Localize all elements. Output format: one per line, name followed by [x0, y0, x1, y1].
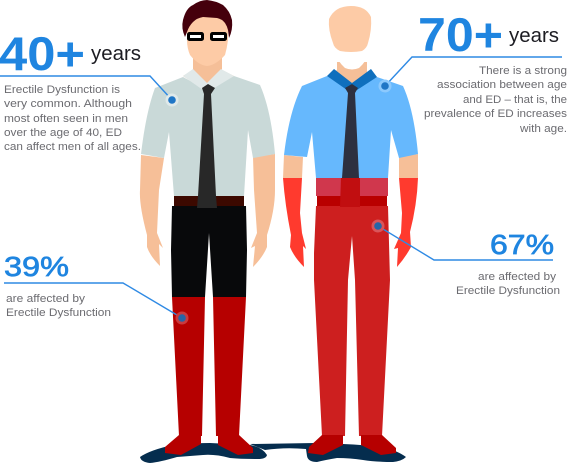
body text: Erectile Dysfunction is: [4, 84, 121, 96]
caption: [6, 293, 111, 319]
collar: [327, 69, 377, 90]
caption: are affected by: [478, 271, 557, 283]
marker: [378, 80, 392, 92]
shirt: [141, 76, 275, 196]
bald head: [329, 6, 371, 52]
leader line: [385, 57, 562, 86]
callout: 40+ years: [0, 27, 178, 153]
marker: [176, 312, 188, 324]
body text: [4, 84, 141, 153]
leader line: [4, 283, 182, 318]
right arm: [251, 154, 275, 267]
caption: Erectile Dysfunction: [6, 307, 111, 319]
callout: 67%: [372, 220, 560, 297]
heading unit: years: [509, 25, 559, 47]
red trouser section: [172, 297, 246, 436]
left skin arm: [283, 155, 303, 178]
body text: can affect men of all ages.: [4, 141, 141, 153]
left arm: [140, 155, 164, 266]
caption: are affected by: [6, 293, 86, 305]
lower tie: [340, 178, 360, 207]
marker: [372, 220, 384, 232]
body text: over the age of 40, ED: [4, 127, 122, 139]
ground shadow: [140, 443, 406, 463]
body text: association between age: [437, 79, 567, 91]
leader line: [378, 226, 553, 260]
percentage: 67%: [490, 229, 554, 260]
heading unit: years: [91, 43, 141, 65]
callout: 70+ years: [378, 8, 568, 135]
right glove: [394, 178, 418, 267]
belt: [317, 196, 387, 206]
body text: very common. Although: [4, 98, 132, 110]
shoes: [308, 435, 396, 455]
tie: [197, 84, 217, 208]
belt: [174, 196, 244, 206]
leader line: [0, 76, 172, 100]
neck: [327, 62, 377, 92]
head: [187, 14, 228, 66]
body text: and ED – that is, the: [463, 94, 567, 106]
glasses: [188, 34, 226, 40]
man: 40+ years: [140, 0, 275, 455]
caption: [456, 271, 560, 297]
red trousers: [314, 206, 390, 436]
right skin arm: [399, 154, 418, 178]
collar: [183, 69, 234, 90]
heading number: 70+: [418, 8, 503, 61]
shirt: [284, 76, 418, 178]
percentage: 39%: [4, 251, 69, 282]
body text: most often seen in men: [4, 113, 128, 125]
tie: [342, 84, 359, 178]
body text: with age.: [519, 123, 567, 135]
body text: prevalence of ED increases: [424, 108, 568, 120]
body text: [424, 65, 568, 135]
callout: 39%: [4, 251, 188, 324]
neck: [183, 58, 234, 92]
white beard: [329, 30, 374, 70]
waist band: [316, 178, 388, 196]
man: 70+ years: [283, 6, 418, 455]
caption: Erectile Dysfunction: [456, 285, 560, 297]
hair: [182, 0, 232, 38]
body text: There is a strong: [479, 65, 567, 77]
left glove: [283, 178, 306, 267]
heading number: 40+: [0, 27, 85, 80]
shoes: [165, 435, 253, 455]
black trousers: [171, 206, 247, 297]
marker: [166, 94, 178, 106]
